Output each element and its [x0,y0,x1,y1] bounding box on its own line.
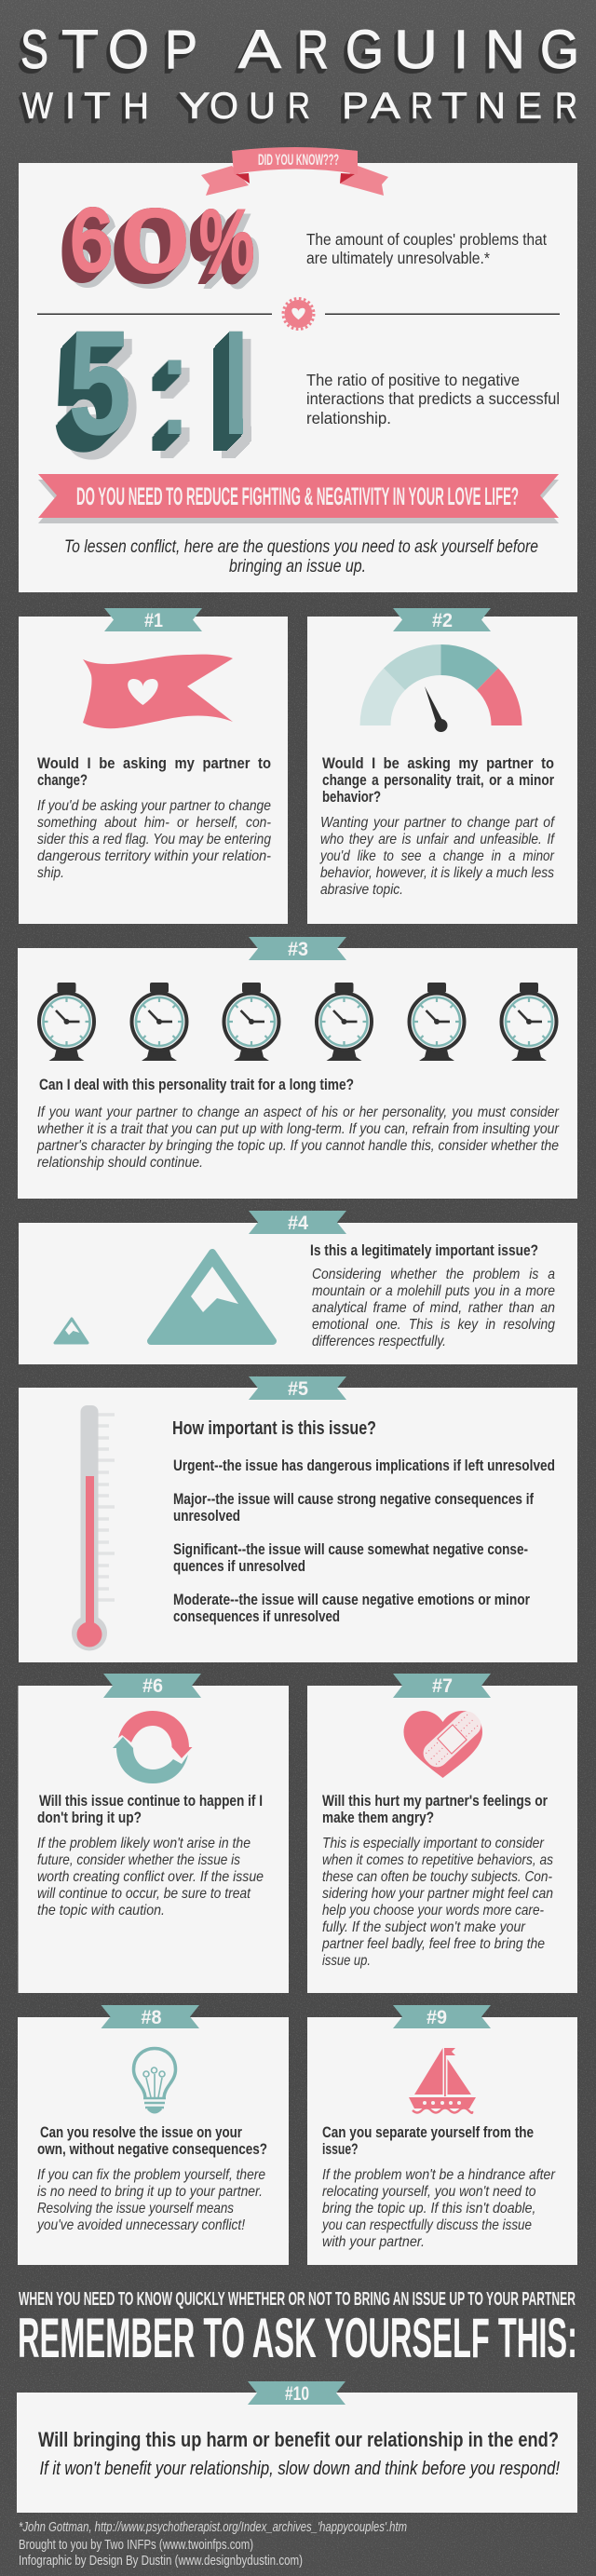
body text: If you'd be asking your partner to change [37,798,271,814]
tag: #10: #10 [285,2383,309,2405]
title line: with your partner: H [123,86,149,127]
title line: stop arguing: G [540,20,579,80]
banner: do you need to reduce [38,474,559,523]
text: intro: bringing an issue up. [229,557,366,576]
stat: 60% [70,191,254,291]
title line: with your partner: T [441,86,467,127]
tag: #5: #5 [288,1378,308,1400]
tag: #2 [393,608,491,631]
tag: #3: #3 [288,939,308,960]
panel: did you know [19,147,577,592]
title line: stop arguing: R [297,20,329,80]
heading [322,1793,548,1826]
panel: #3 [18,937,577,1199]
heading: change? [37,772,88,789]
text: 60% explanation: are ultimately unresolvable.* [306,249,490,267]
icon: molehill [55,1319,88,1343]
heading [37,755,271,789]
body text [321,1836,553,1969]
footer credits: Infographic by Design By Dustin (www.designbydustin.com) [19,2554,303,2569]
divider with heart badge [37,298,560,330]
body text: If the problem likely won't arise in the [37,1836,251,1851]
heading: Will this hurt my partner's feelings or [322,1793,548,1810]
body text [312,1267,555,1349]
body text: the topic with caution. [37,1903,165,1918]
icon: light bulb [134,2049,175,2112]
tag: #9 [393,2005,491,2028]
tag: #3 [249,937,346,960]
body text: Resolving the issue yourself means [37,2201,234,2217]
icon: sailboat [409,2048,476,2113]
icon: red flag with heart [83,655,233,728]
importance levels list: Moderate--the issue will cause negative emotions or minor [173,1592,530,1608]
title line: with your partner: R [288,86,310,127]
body text: differences respectfully. [312,1334,446,1349]
text: 5:1 explanation: The ratio of positive to negative [306,371,520,389]
body text: analytical frame of mind, rather than an [312,1300,555,1316]
text: intro [64,537,538,576]
heading: Can you resolve the issue on your [40,2124,242,2141]
ribbon: did you know [201,147,388,196]
title line: stop arguing: P [165,20,197,80]
tag: #1 [104,608,202,631]
body text: issue up. [322,1953,371,1969]
title line: with your partner: N [478,86,506,127]
importance levels list: Significant--the issue will cause somewhat negative conse- [173,1541,528,1558]
body text: relationship should continue. [37,1155,203,1171]
body text: relocating yourself, you won't need to [322,2184,536,2200]
title line: with your partner: A [371,86,400,127]
heading: Is this a legitimately important issue? [310,1242,538,1259]
body text: who they are is unfair and unfeasible. If [320,832,555,847]
body text [36,2167,265,2233]
icon: thermometer [72,1405,115,1650]
stat: 60%: 0 [122,192,188,291]
heading: How important is this issue? [172,1418,376,1439]
body text [319,815,555,898]
tag: #5 [249,1376,346,1400]
importance levels list: quences if unresolved [173,1558,305,1575]
body text: is no need to bring it up to your partner. [37,2184,263,2200]
stat: 60%: % [199,193,254,291]
body text: these can often be touchy subjects. Con- [322,1869,552,1885]
panel: #5 [19,1376,577,1662]
tag: #7 [393,1674,491,1698]
body text: you can respectfully discuss the issue [321,2217,532,2233]
body text: sidering how your partner might feel can [322,1886,553,1902]
heading: Can you separate yourself from the [322,2124,534,2141]
icon: cycle arrows [113,1711,192,1783]
heading: change a personality trait, or a minor [322,772,554,789]
title line: with your partner: T [84,86,111,127]
importance levels list: unresolved [173,1508,240,1525]
heading [322,2124,534,2158]
heading [37,1793,263,1826]
title line: stop arguing: T [61,20,99,80]
tag: #10 [248,2381,345,2405]
body text: Considering whether the problem is a [312,1267,555,1282]
title line: with your partner [22,86,577,127]
title line: with your partner: I [65,86,75,127]
heading: own, without negative consequences? [37,2141,267,2158]
importance levels list [173,1457,555,1625]
body text: when it comes to repetitive behaviors, as [322,1852,553,1868]
title line: with your partner: W [22,86,53,127]
panel: #4 [19,1211,577,1364]
body text: you've avoided unnecessary conflict! [36,2217,245,2233]
body text: help you choose your words more care- [322,1903,544,1918]
stat: 5:1: 1 [201,299,264,466]
heading [37,2124,267,2158]
title line: stop arguing [20,20,579,80]
title line: stop arguing: I [454,20,468,80]
panel: #6 [19,1674,289,1993]
heading: issue? [322,2141,358,2158]
title line: with your partner: P [342,86,369,127]
body text: fully. If the subject won't make your [322,1919,526,1935]
body text: dangerous territory within your relation- [37,848,271,864]
body text: sider this a red flag. You may be entering [37,832,271,847]
ribbon: did you know: DID YOU KNOW??? [258,152,339,169]
body text: worth creating conflict over. If the issue [37,1869,264,1885]
icon: heart with bandage [404,1707,485,1778]
stat: 5:1: : [156,307,194,464]
title [20,20,579,127]
title line: with your partner: R [555,86,577,127]
title line: with your partner: O [210,86,238,127]
body text: partner feel badly, feel free to bring the [321,1936,545,1952]
body text: mountain or a molehill puts you in a more [312,1283,555,1299]
body text [321,2167,556,2250]
body text: will continue to occur, be sure to treat [37,1886,251,1902]
title line: stop arguing: G [345,20,384,80]
body text: with your partner. [322,2234,425,2250]
tag: #1: #1 [144,610,163,631]
title line: stop arguing: A [238,20,281,80]
panel: #2 [307,608,577,924]
text: 60% explanation: The amount of couples' problems that [306,230,547,249]
body text: emotional one. This is key in resolving [312,1317,555,1333]
tag: #6: #6 [142,1675,163,1697]
tag: #4: #4 [288,1213,308,1234]
footer credits: Brought to you by Two INFPs (www.twoinfps.com) [19,2538,253,2553]
body text: Wanting your partner to change part of [320,815,555,831]
icon: six clocks [39,983,557,1061]
title line: stop arguing: S [20,20,48,80]
text: 60% explanation [306,230,547,267]
text: 5:1 explanation: relationship. [306,409,391,427]
heading: Will this issue continue to happen if I [39,1793,263,1810]
title line: with your partner: R [411,86,433,127]
heading: don't bring it up? [37,1810,142,1826]
heading: behavior? [322,789,381,806]
body text: If you can fix the problem yourself, there [37,2167,265,2183]
text: 5:1 explanation: interactions that predicts a successful [306,389,560,408]
title line: with your partner: U [249,86,276,127]
footer credits [19,2520,407,2569]
body text: you'd like to see a change in a minor [319,848,555,864]
importance levels list: consequences if unresolved [173,1608,340,1625]
heading: make them angry? [322,1810,434,1826]
body text: future, consider whether the issue is [37,1852,240,1868]
footer credits: *John Gottman, http://www.psychotherapist.org/Index_archives_'happycouples'.htm [19,2520,407,2535]
title line: with your partner: E [518,86,542,127]
tag: #8: #8 [142,2007,162,2028]
title line: stop arguing: O [108,20,149,80]
tag: #2: #2 [432,610,453,631]
title line: stop arguing: N [485,20,525,80]
text: 5:1 explanation [306,371,560,427]
panel: #1 [19,608,288,924]
body text [37,1836,264,1918]
heading: Can I deal with this personality trait for a long time? [39,1077,354,1093]
panel: #7 [307,1674,577,1993]
body text: ship. [37,865,64,881]
heading [322,755,554,806]
panel: #9 [307,2005,577,2265]
icon: mountain [151,1253,273,1341]
tag: #6 [103,1674,201,1698]
body text: If the problem won't be a hindrance after [322,2167,556,2183]
heading: Would I be asking my partner to [322,755,554,772]
body text: bring the topic up. If this isn't doable, [322,2201,536,2217]
tag: #4 [249,1211,346,1234]
tag: #8 [101,2005,199,2028]
body text: behavior, however, it is likely a much less [320,865,554,881]
stat: 5:1: 5 [68,299,131,466]
stat: 5:1 [56,332,251,460]
body text [37,798,271,881]
body text: This is especially important to consider [322,1836,545,1851]
icon: gauge [359,644,522,732]
heading: Would I be asking my partner to [37,755,271,772]
body text: something about him- or herself, con- [37,815,271,831]
panel: #10 [17,2381,577,2513]
title line: stop arguing: U [394,20,438,80]
stat: 60%: 6 [70,191,113,290]
body text: abrasive topic. [320,882,403,898]
panel: #8 [18,2005,289,2265]
title line: with your partner: Y [179,86,210,127]
tag: #9: #9 [427,2007,447,2028]
tag: #7: #7 [432,1675,453,1697]
body text [36,1105,560,1171]
